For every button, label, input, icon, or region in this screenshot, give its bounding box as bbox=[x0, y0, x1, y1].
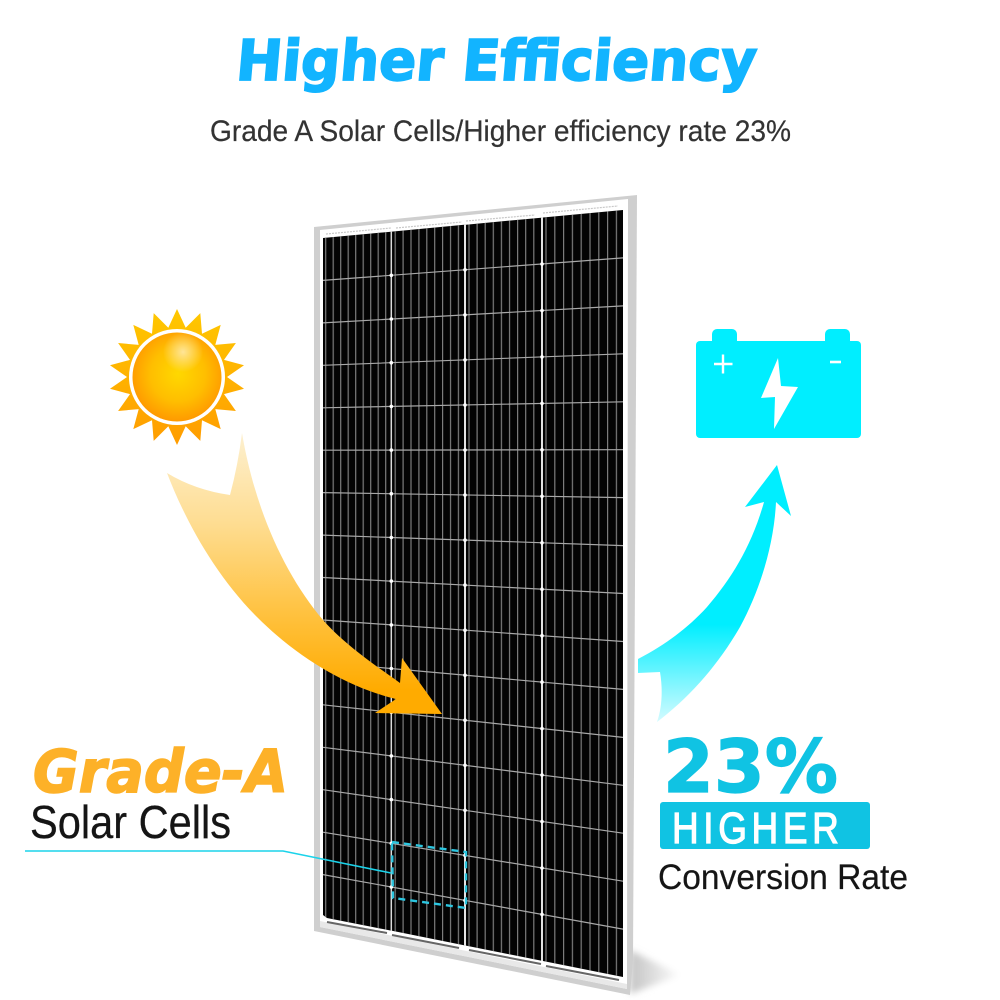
label: Conversion Rate: Conversion Rate bbox=[658, 858, 908, 897]
cell column 1 bbox=[323, 232, 391, 931]
subtitle: Grade A Solar Cells/Higher efficiency rate 23% bbox=[210, 115, 791, 148]
lightning bolt bbox=[761, 358, 798, 429]
icon: battery bbox=[696, 329, 861, 438]
panel frame bbox=[314, 195, 637, 995]
badge: HIGHER bbox=[660, 802, 870, 853]
label: Grade-A: Grade-A bbox=[33, 737, 288, 806]
cell column 2 bbox=[392, 225, 464, 945]
badge text: HIGHER bbox=[672, 803, 843, 853]
inner white backing bbox=[320, 199, 628, 989]
sun disc bbox=[132, 332, 222, 422]
icon: sun bbox=[110, 309, 244, 445]
bottom frame band bbox=[320, 921, 627, 989]
sun white ring bbox=[129, 329, 225, 425]
battery body bbox=[696, 341, 861, 438]
panel shadow bbox=[630, 950, 680, 994]
stat: 23%: 23% bbox=[663, 725, 838, 810]
callout dashed cell highlight bbox=[392, 842, 466, 908]
solar panel bbox=[314, 195, 637, 995]
arrow: sunlight into panel bbox=[167, 433, 442, 714]
minus sign bbox=[830, 361, 841, 363]
title: Higher Efficiency bbox=[234, 29, 759, 94]
sun highlight bbox=[163, 332, 203, 372]
arrow: power to battery bbox=[638, 465, 791, 722]
top margin fine print bbox=[326, 206, 618, 234]
column dividers bbox=[391, 217, 542, 961]
busbar stripes bbox=[323, 210, 623, 977]
label: Solar Cells: Solar Cells bbox=[30, 796, 231, 848]
sun rays bbox=[110, 309, 244, 445]
bottom edge strips bbox=[327, 922, 619, 980]
badge background bbox=[660, 802, 870, 849]
cell column 3 bbox=[466, 218, 541, 961]
plus sign bbox=[714, 354, 732, 374]
cell column 4 bbox=[543, 210, 623, 977]
callout line bbox=[25, 851, 391, 873]
cell row lines bbox=[323, 258, 623, 929]
cell corner junctions bbox=[391, 264, 542, 914]
battery terminals bbox=[712, 329, 850, 345]
